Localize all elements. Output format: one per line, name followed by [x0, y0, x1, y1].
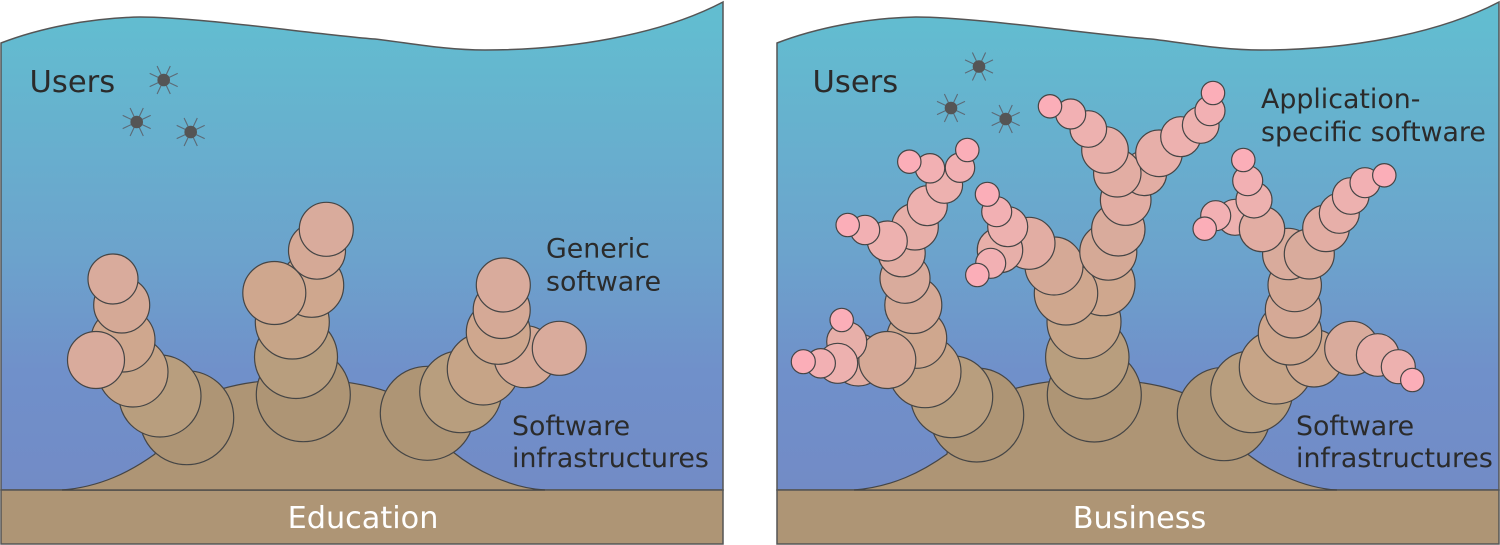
label: Software infrastructures: Software [512, 411, 630, 442]
label: Software infrastructures: Software [1296, 411, 1414, 442]
water background [1, 2, 723, 490]
coral: middle generic software [243, 202, 353, 442]
icon: user cluster [937, 52, 1020, 133]
label: Application-specific software: Application- [1261, 84, 1420, 115]
ground: Business [777, 490, 1499, 544]
coral: middle application-specific software [966, 81, 1225, 442]
label: Users: Users [812, 65, 898, 100]
coral: left generic software [68, 254, 234, 465]
panel: Business [777, 2, 1499, 544]
label: Users: Users [30, 65, 115, 100]
coral: right generic software [380, 258, 586, 460]
label: Software infrastructures: infrastructures [512, 443, 709, 474]
coral: right application-specific software [1177, 148, 1424, 461]
label: Application-specific software: specific software [1261, 117, 1486, 148]
label: Generic software: software [546, 266, 661, 298]
label: Software infrastructures: infrastructures [1296, 443, 1493, 474]
software infrastructure hill [854, 379, 1337, 490]
coral: left application-specific software [791, 138, 1024, 462]
icon: user cluster [123, 66, 205, 146]
water background [777, 2, 1499, 490]
label: Education: Education [288, 501, 438, 536]
label: Business: Business [1073, 501, 1206, 536]
software infrastructure hill [62, 379, 545, 490]
ground: Education [1, 490, 723, 544]
label: Generic software: Generic [546, 234, 650, 264]
panel: Education [1, 2, 723, 544]
